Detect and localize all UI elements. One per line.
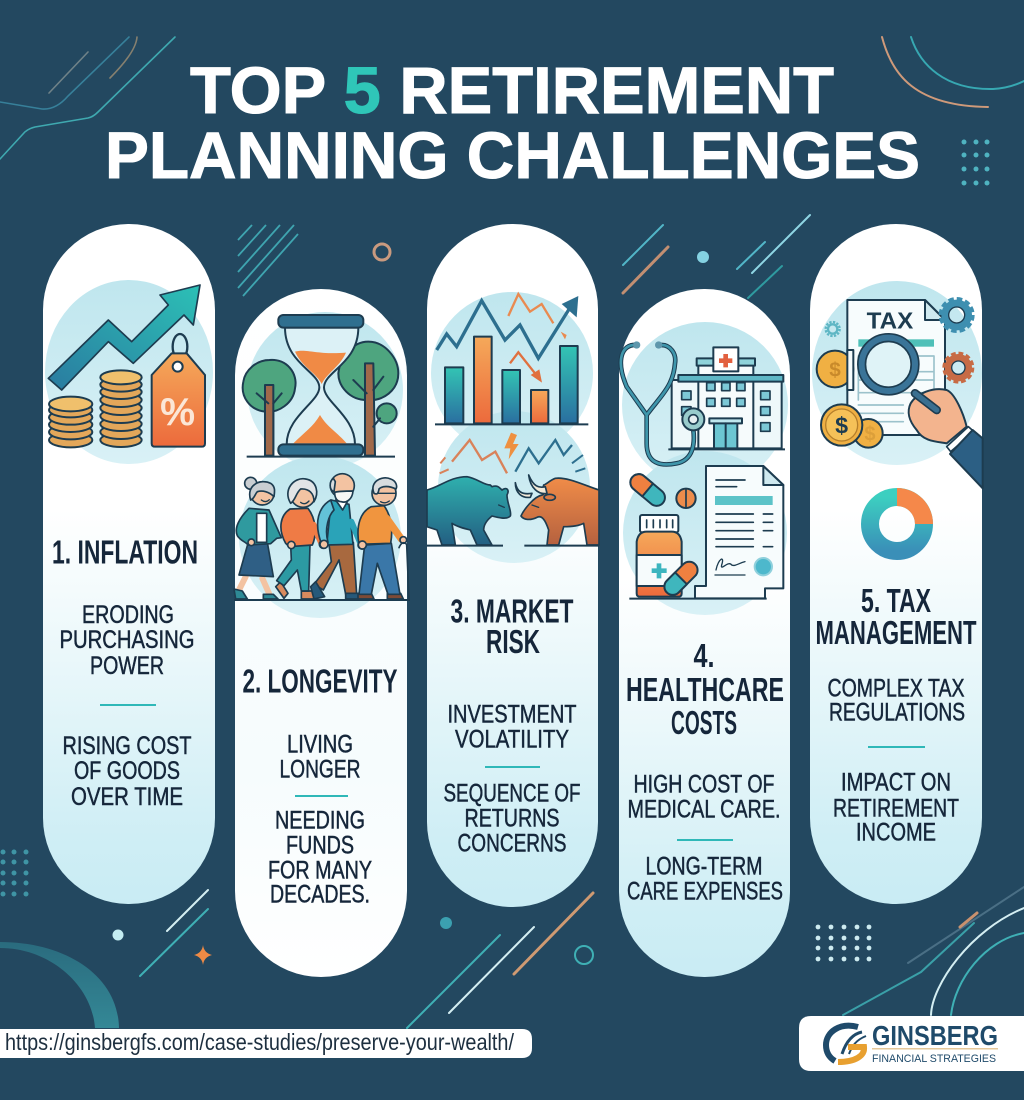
- heading: 3. MARKET: [450, 592, 574, 630]
- icon: rising arrow, coins and price tag: %: [160, 390, 195, 434]
- decorative arcs top right: [882, 37, 1024, 107]
- text block: complex tax regulations: COMPLEX TAX: [828, 674, 965, 702]
- icon: rising arrow, coins and price tag: [48, 285, 205, 447]
- text block: sequence of returns: RETURNS: [464, 804, 560, 832]
- text block: investment volatility: [448, 700, 576, 754]
- text block: impact on income: IMPACT ON: [841, 768, 951, 796]
- chart: donut: [870, 488, 933, 551]
- text block: rising cost: [62, 732, 192, 811]
- panel: tax management: [810, 224, 983, 904]
- heading: RISK: [486, 623, 540, 660]
- heading: [816, 582, 976, 651]
- text block: needing funds: NEEDING: [275, 806, 365, 834]
- icon: tax document, magnifier, gears, coins and hand: TAX: [867, 307, 914, 333]
- heading: 5. TAX: [861, 582, 931, 619]
- heading: COSTS: [671, 704, 737, 741]
- text block: impact on income: RETIREMENT: [833, 794, 959, 822]
- title: [105, 53, 920, 192]
- url bar: https://ginsbergfs.com/case-studies/preserve-your-wealth/: [5, 1029, 515, 1055]
- dot grid bottom left: [0, 850, 28, 896]
- text block: high cost: HIGH COST OF: [634, 770, 774, 798]
- text block: complex tax regulations: REGULATIONS: [829, 698, 965, 726]
- text block: sequence of returns: SEQUENCE OF: [444, 780, 580, 808]
- heading: 2. LONGEVITY: [242, 662, 398, 700]
- panel: market risk: [427, 224, 599, 907]
- icon: four seniors walking: [234, 474, 410, 600]
- text block: purchasing power: [60, 601, 194, 680]
- panel: inflation: [43, 224, 215, 904]
- panel: longevity: [234, 289, 410, 977]
- text block: needing funds: FOR MANY: [268, 856, 372, 884]
- text block: complex tax regulations: [828, 674, 965, 726]
- dot grid bottom right: [816, 925, 871, 961]
- text block: impact on income: INCOME: [856, 818, 936, 846]
- text block: investment volatility: INVESTMENT: [448, 700, 576, 728]
- text block: rising cost: OF GOODS: [74, 757, 180, 785]
- heading: [450, 592, 574, 660]
- icon: tax document, magnifier, gears, coins and hand: $: [835, 412, 848, 438]
- heading: [626, 637, 784, 741]
- text block: investment volatility: VOLATILITY: [455, 726, 569, 754]
- dot grid top right: [962, 140, 990, 186]
- heading: 4.: [694, 637, 714, 674]
- icon: bear and bull: [427, 433, 599, 546]
- icon: tax document, magnifier, gears, coins and hand: [817, 299, 983, 488]
- text block: high cost: MEDICAL CARE.: [628, 796, 780, 824]
- heading: 1. INFLATION: [52, 534, 198, 570]
- icon: pills, bottle and medical bill: [627, 466, 783, 599]
- text block: purchasing power: ERODING: [82, 601, 174, 629]
- brand name: GINSBERG: [872, 1020, 998, 1051]
- text block: long-term care: LONG-TERM: [646, 852, 762, 880]
- logo: [799, 1016, 1024, 1071]
- text block: impact on income: [833, 768, 959, 846]
- text block: sequence of returns: CONCERNS: [458, 830, 566, 858]
- text block: purchasing power: PURCHASING: [60, 626, 194, 654]
- text block: rising cost: RISING COST: [62, 732, 192, 760]
- icon: bar and line chart: [435, 294, 588, 424]
- text block: long-term care: [627, 852, 783, 906]
- icon: hourglass and trees: [243, 315, 398, 457]
- text block: needing funds: DECADES.: [270, 880, 370, 908]
- text block: needing funds: [268, 806, 372, 908]
- title: TOP 5 RETIREMENT: [190, 53, 834, 127]
- text block: needing funds: FUNDS: [286, 832, 354, 860]
- icon: tax document, magnifier, gears, coins and hand: $: [864, 424, 876, 446]
- panel: healthcare costs: [619, 289, 790, 977]
- text block: living longer: LONGER: [280, 756, 360, 784]
- text block: high cost: [628, 770, 780, 824]
- text block: purchasing power: POWER: [90, 652, 164, 680]
- decorative hatch and ring: [238, 225, 390, 296]
- heading: HEALTHCARE: [626, 671, 784, 708]
- tagline: FINANCIAL STRATEGIES: [872, 1053, 996, 1065]
- text block: living longer: LIVING: [287, 730, 353, 758]
- decorative lines top left: [0, 37, 175, 159]
- icon: hospital and stethoscope: [621, 341, 785, 464]
- text block: long-term care: CARE EXPENSES: [627, 878, 783, 906]
- title: PLANNING CHALLENGES: [105, 118, 920, 192]
- decorative lines upper right: [623, 215, 810, 298]
- icon: logo mark: [826, 1026, 866, 1062]
- text block: living longer: [280, 730, 360, 784]
- decorative elements bottom: [0, 887, 1024, 1028]
- text block: rising cost: OVER TIME: [71, 783, 183, 811]
- text block: sequence of returns: [444, 780, 580, 858]
- icon: tax document, magnifier, gears, coins and hand: $: [829, 359, 841, 382]
